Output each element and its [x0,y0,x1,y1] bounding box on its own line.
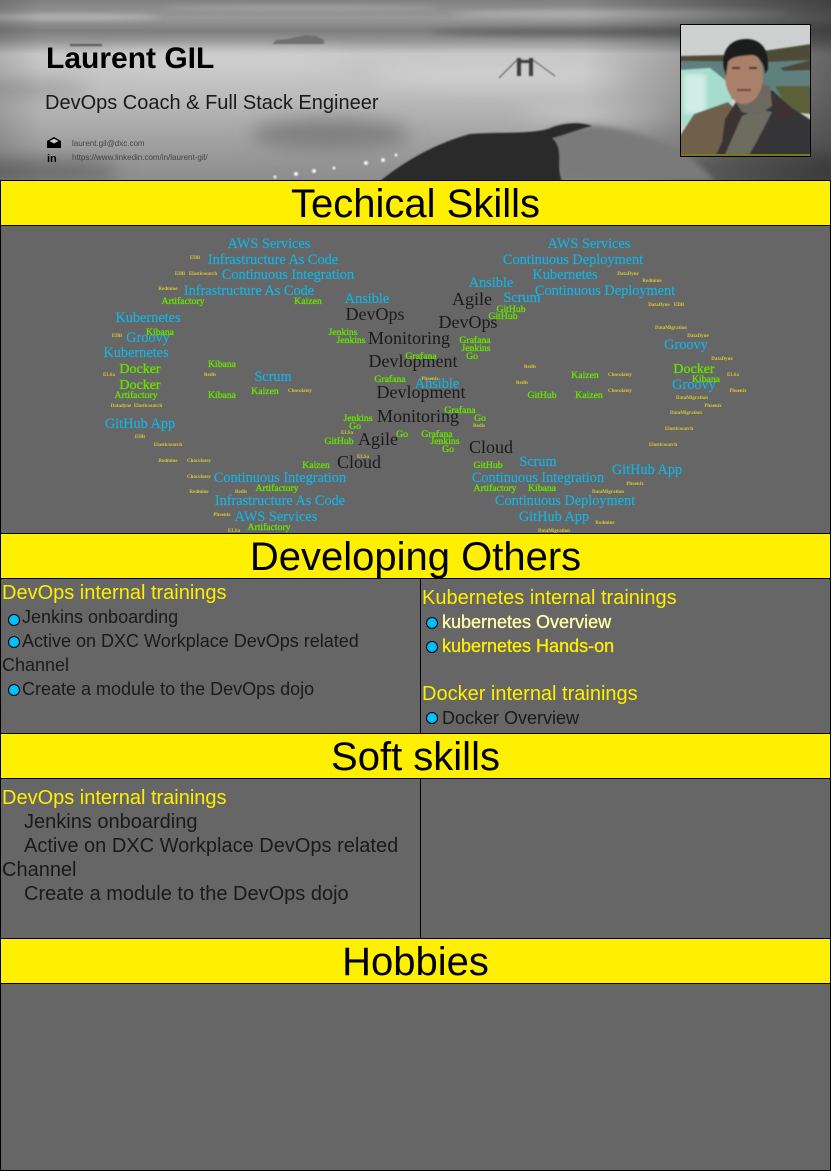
small yellow skills: Redmine [642,279,662,284]
black skills: Monitoring [377,406,459,426]
small yellow skills: DataDyne [617,272,639,277]
small yellow skills: Phoenix [421,377,439,382]
green skills: GitHub [496,304,526,315]
blue skills: Continuous Integration [214,470,346,486]
panel: hobbies [0,983,831,1171]
panel: technical skills word cloud [0,225,831,534]
small yellow skills: Redis [204,373,216,378]
list item: kubernetes Overview [442,612,611,632]
small yellow skills: Elasticsearch [665,427,693,432]
green skills: Go [442,444,454,455]
small yellow skills: DataMigration [676,396,708,401]
list item: Active on DXC Workplace DevOps related [24,835,398,857]
heading: Developing Others [0,533,831,579]
blue skills: AWS Services [235,509,318,525]
small yellow skills: DataDyne [711,357,733,362]
black skills: Devlopment [369,351,457,371]
black skills: Agile [358,429,398,449]
list item continuation: Channel [2,655,69,675]
small yellow skills [103,256,747,534]
blue skills: Continuous Deployment [535,283,675,299]
small yellow skills: Redis [524,365,536,370]
green skills: Kaizen [575,390,603,401]
black skills: Monitoring [368,328,450,348]
green skills: Docker [119,362,161,377]
background photo: foggy bridge landscape [0,0,831,180]
small yellow skills: Chocolatey [187,459,211,464]
green skills: Jenkins [336,335,366,346]
green skills: Jenkins [430,436,460,447]
black skills: Cloud [337,452,381,472]
green skills: Grafana [444,405,476,416]
blue skills: AWS Services [548,236,631,252]
header banner [0,0,831,180]
blue skills: Scrum [503,290,541,306]
blue skills: GitHub App [105,416,175,432]
blue skills: Kubernetes [532,267,598,283]
small yellow skills: Phoenix [213,513,231,518]
heading: Techical Skills: Techical Skills [291,182,540,226]
heading: Techical Skills [0,180,831,226]
small yellow skills: ELSa [103,373,115,378]
heading: Hobbies [0,938,831,984]
list item: kubernetes Hands-on [442,636,614,656]
green skills: GitHub [527,390,557,401]
green skills: Artifactory [255,483,299,494]
small yellow skills: EDB [674,303,685,308]
small yellow skills: Chocolatey [608,373,632,378]
bullet [8,684,20,696]
blue skills: Kubernetes [115,310,181,326]
small yellow skills: Chocolatey [288,389,312,394]
green skills: Jenkins [461,343,491,354]
green skills: GitHub [473,460,503,471]
green skills: Go [474,413,486,424]
small yellow skills: Elasticsearch [154,443,182,448]
green skills: Grafana [459,335,491,346]
small yellow skills: DataMigration [670,411,702,416]
list item: Create a module to the DevOps dojo [24,883,349,905]
small yellow skills: Redis [516,381,528,386]
green skills: Go [349,421,361,432]
black skills: Cloud [469,437,513,457]
linkedin address: https://www.linkedin.com/in/laurent-gil/ [72,153,208,162]
green skills: Go [466,351,478,362]
small yellow skills: Redmine [595,521,615,526]
email address: laurent.gil@dxc.com [72,139,145,148]
green skills: GitHub [324,436,354,447]
black skills: Agile [452,289,492,309]
heading: Hobbies: Hobbies [342,940,489,984]
small yellow skills: EDB [190,256,201,261]
subheading: DevOps internal trainings: DevOps internal trainings [2,582,227,604]
green skills: Kibana [146,327,175,338]
bullet [426,641,438,653]
subheading: Docker internal trainings: Docker internal trainings [422,683,638,705]
green skills: Go [396,429,408,440]
panel: developing others right [420,578,831,734]
small yellow skills: ELSa [228,529,240,534]
heading: Soft skills: Soft skills [331,735,500,779]
green skills: Kaizen [294,296,322,307]
blue skills: Infrastructure As Code [208,252,338,268]
small yellow skills: Chocolatey [187,475,211,480]
list item: Active on DXC Workplace DevOps related [22,631,359,651]
small yellow skills: DataMigration [592,490,624,495]
green skills: Kaizen [571,370,599,381]
small yellow skills: DataDyne [648,303,670,308]
small yellow skills: EDB [112,334,123,339]
green skills: GitHub [488,311,518,322]
list item: Jenkins onboarding [22,607,178,627]
blue skills: Scrum [519,454,557,470]
blue skills: Scrum [254,369,292,385]
green skills: Kibana [528,483,557,494]
blue skills: Kubernetes [103,345,169,361]
black skills: DevOps [346,304,404,324]
blue skills: Infrastructure As Code [215,493,345,509]
black skills [337,289,513,472]
small yellow skills: Redmine [189,490,209,495]
small yellow skills: Phoenix [626,482,644,487]
small yellow skills: DataMigration [538,529,570,534]
icon: envelope [47,137,61,148]
black skills: Devlopment [377,382,465,402]
green skills: Artifactory [114,390,158,401]
green skills: Grafana [374,374,406,385]
green skills [114,296,721,533]
green skills: Docker [119,378,161,393]
black skills: DevOps [438,312,498,332]
blue skills: Continuous Deployment [503,252,643,268]
panel: soft skills right [420,778,831,939]
subheading: DevOps internal trainings: DevOps internal trainings [2,787,227,809]
small yellow skills: ELSa [727,373,739,378]
bullet [426,617,438,629]
panel: soft skills left [0,778,421,939]
blue skills: Groovy [672,377,717,393]
list item: Jenkins onboarding [24,811,197,833]
profile photo [680,24,811,157]
small yellow skills: Redis [473,424,485,429]
word cloud: infinity loop of skills [103,236,747,534]
green skills: Artifactory [247,522,291,533]
small yellow skills: ELSa [357,455,369,460]
list item: Docker Overview [442,708,579,728]
green skills: Kaizen [251,386,279,397]
name: Laurent GIL [46,42,214,75]
green skills: Jenkins [328,327,358,338]
subheading: Kubernetes internal trainings: Kubernetes internal trainings [422,587,677,609]
small yellow skills: Datadyne [111,404,132,409]
blue skills: GitHub App [519,509,589,525]
heading: Soft skills [0,733,831,779]
small yellow skills: Redmine [158,287,178,292]
blue skills: Infrastructure As Code [184,283,314,299]
small yellow skills: Elasticsearch [134,404,162,409]
blue skills: Ansible [469,275,513,291]
green skills: Kibana [208,359,237,370]
icon: linkedin: in [47,153,57,165]
blue skills: Groovy [126,330,171,346]
blue skills: Groovy [664,337,709,353]
blue skills: Continuous Integration [222,267,354,283]
small yellow skills: ELSa [341,431,353,436]
heading: Developing Others: Developing Others [250,535,581,579]
small yellow skills: DataDyne [687,334,709,339]
bullet [426,712,438,724]
mountain silhouette [540,125,715,181]
blue skills [103,236,717,525]
small yellow skills: Chocolatey [608,389,632,394]
small yellow skills: DataMigration [655,326,687,331]
small yellow skills: Elasticsearch [189,272,217,277]
blue skills: Ansible [415,376,459,392]
list item continuation: Channel [2,859,77,881]
green skills: Artifactory [161,296,205,307]
small yellow skills: EDB [175,272,186,277]
bullet [8,636,20,648]
green skills: Jenkins [343,413,373,424]
small yellow skills: Redmine [158,459,178,464]
blue skills: Continuous Deployment [495,493,635,509]
blue skills: AWS Services [228,236,311,252]
small yellow skills: EDB [135,435,146,440]
panel: developing others left [0,578,421,734]
job title: DevOps Coach & Full Stack Engineer [45,92,378,114]
list item: Create a module to the DevOps dojo [22,679,314,699]
small yellow skills: Elasticsearch [649,443,677,448]
blue skills: GitHub App [612,462,682,478]
blue skills: Continuous Integration [472,470,604,486]
bullet [8,614,20,626]
green skills: Kibana [208,390,237,401]
green skills: Artifactory [473,483,517,494]
blue skills: Ansible [345,291,389,307]
green skills: Grafana [421,429,453,440]
green skills: Kibana [692,374,721,385]
green skills: Kaizen [302,460,330,471]
small yellow skills: Phoenix [729,389,747,394]
small yellow skills: Phoenix [704,404,722,409]
small yellow skills: Redis [235,490,247,495]
green skills: Docker [673,362,715,377]
green skills: Grafana [405,351,437,362]
